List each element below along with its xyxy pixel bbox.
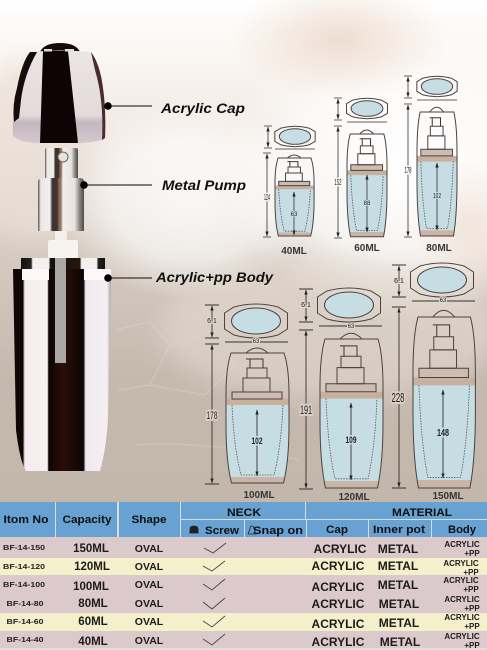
table text: OVAL [135,598,164,610]
table text: 80ML [78,598,108,610]
table text: ACRYLIC [444,613,480,622]
table header: Inner pot [373,524,425,536]
table text: OVAL [135,616,164,628]
table text: ACRYLIC [443,576,479,585]
table text: ACRYLIC [312,617,365,631]
icon: snap-on neck [248,526,256,534]
table text: BF-14-150 [3,545,45,552]
table text: METAL [380,635,420,649]
table text: ACRYLIC [444,595,480,604]
diagram: 80ML: 102 [433,193,441,200]
diagram: 150ML: 63 [440,298,447,304]
table text: 40ML [78,636,108,648]
diagram: 150ML: 150ML [432,491,464,502]
diagram: 100ML: 100ML [243,490,275,501]
table text: BF-14-40 [6,637,44,644]
diagram: 100ML: 6.1 [207,318,217,325]
callout: acrylic + pp body: Acrylic+pp Body [155,269,274,285]
table text: 120ML [74,561,110,573]
table text: METAL [379,616,419,630]
screw-neck check marks [203,543,226,645]
table text: METAL [378,559,418,573]
table text: +PP [464,549,480,558]
table header: MATERIAL [392,507,452,519]
table header: Snap on [253,525,303,537]
table text: +PP [463,585,479,594]
diagram: 100ML: 102 [252,436,262,446]
callout: acrylic cap [104,100,245,116]
table text: OVAL [135,579,164,591]
table text: +PP [464,641,480,650]
icon: screw neck [189,526,199,533]
metal pump [38,148,84,259]
table text: BF-14-80 [6,601,44,608]
diagram: 100ML: 63 [253,339,260,345]
diagram: 120ML: 6.1 [301,302,311,309]
acrylic + pp body [13,258,111,471]
table header: Cap [326,524,348,536]
diagram: 80ML [404,76,457,254]
callout: metal pump: Metal Pump [162,177,246,193]
table header: NECK [227,507,261,519]
table text: ACRYLIC [312,580,365,594]
diagram: 120ML: 63 [348,324,355,330]
table text: ACRYLIC [444,632,480,641]
acrylic cap [13,43,106,143]
callout: acrylic + pp body [104,269,274,285]
diagram: 60ML: 152 [334,178,342,187]
diagram: 60ML: 88 [364,201,371,207]
table header: Screw [205,525,239,537]
diagram: 40ML: 63 [291,212,298,218]
table text: ACRYLIC [314,542,367,556]
table text: +PP [464,622,480,631]
diagram: 120ML: 120ML [338,492,370,503]
table text: ACRYLIC [444,540,480,549]
diagram: 120ML [299,288,383,503]
diagram: 150ML [392,263,475,502]
table text: 150ML [73,543,109,555]
table text: METAL [379,597,419,611]
table text: ACRYLIC [443,559,479,568]
table rows [0,537,487,650]
exploded product photo [13,43,111,471]
table text: OVAL [135,543,164,555]
diagram: 40ML: 40ML [281,246,307,257]
diagram: 120ML: 109 [346,435,356,445]
diagram: 150ML: 6.1 [394,278,404,285]
table text: ACRYLIC [312,597,365,611]
table text: BF-14-60 [6,619,44,626]
table text: 60ML [78,616,108,628]
diagram: 60ML [334,98,387,254]
table text: METAL [378,578,418,592]
table header [0,502,487,537]
diagram: 80ML: 80ML [426,243,452,254]
table text: +PP [464,604,480,613]
specification table [0,502,487,650]
diagram: 100ML: 178 [206,410,218,422]
table header: Shape [132,514,166,526]
table text: 100ML [73,581,109,593]
table header: Itom No [4,514,49,526]
table text: METAL [378,542,418,556]
table text: ACRYLIC [312,559,365,573]
diagram: 150ML: 148 [437,428,449,439]
table text: ACRYLIC [312,635,365,649]
table text: BF-14-100 [3,582,45,589]
table text: BF-14-120 [3,564,45,571]
background [0,0,487,502]
table text: OVAL [135,635,164,647]
diagram: 120ML: 191 [300,403,312,417]
diagram: 80ML: 178 [404,166,412,175]
diagram: 100ML [205,304,289,501]
callout: metal pump [80,177,246,193]
table header: Capacity [62,514,112,526]
diagram: 40ML [263,126,315,257]
table text: +PP [463,568,479,577]
table text: OVAL [135,561,164,573]
diagram: 60ML: 60ML [354,243,380,254]
table text [3,540,480,650]
table header: Body [448,524,477,536]
diagram: 40ML: 124 [264,193,270,202]
diagram: 150ML: 228 [392,390,404,405]
callout: acrylic cap: Acrylic Cap [160,100,245,116]
